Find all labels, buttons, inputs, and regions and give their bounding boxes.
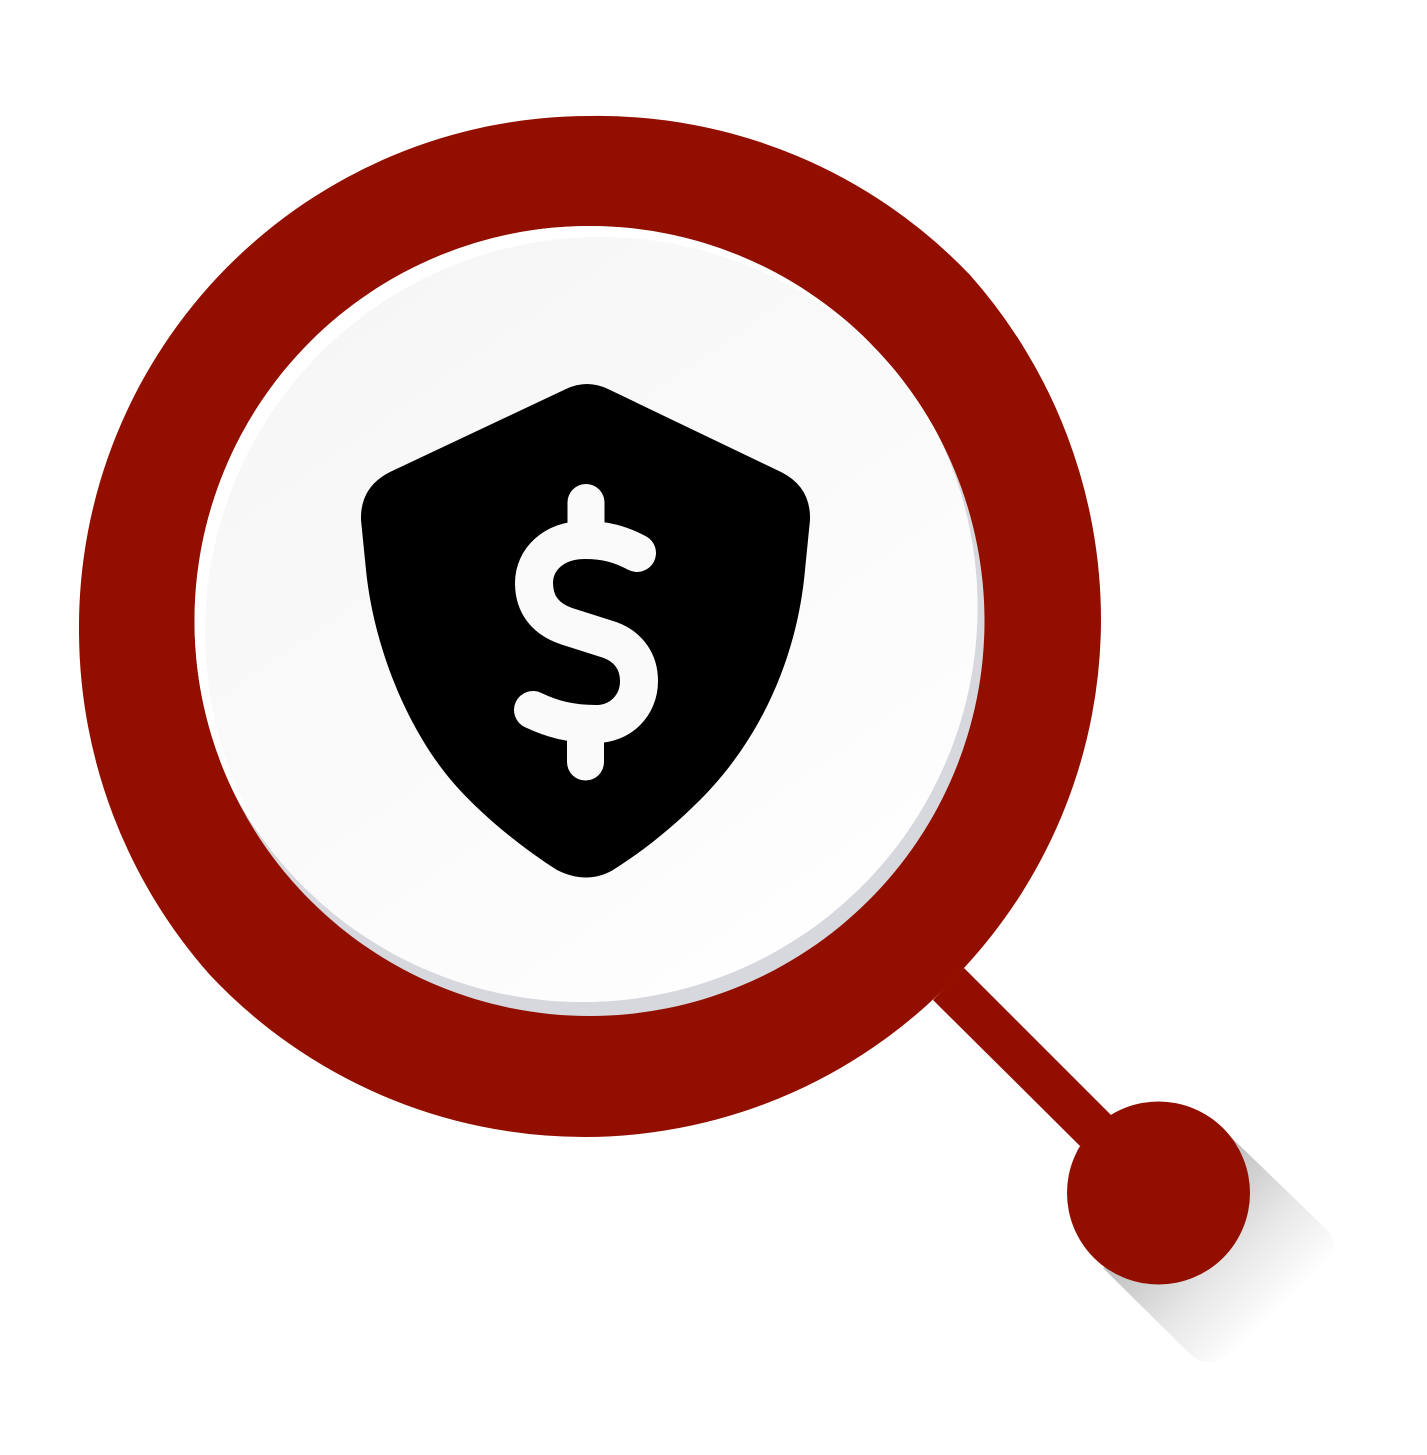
lens inner shadow — [194, 226, 984, 1016]
dollar sign — [533, 502, 639, 762]
magnifier handle stem — [933, 968, 1111, 1146]
lens glass surface — [247, 241, 978, 1002]
illustration: magnifying glass with shield — [78, 116, 1326, 1359]
long shadow of handle knob — [1103, 1138, 1335, 1363]
lens white highlight — [188, 212, 978, 1002]
magnifier red ring — [79, 116, 1101, 1137]
shield — [361, 384, 810, 878]
magnifier handle knob — [1067, 1102, 1250, 1284]
icon: shield with dollar sign — [361, 384, 810, 878]
